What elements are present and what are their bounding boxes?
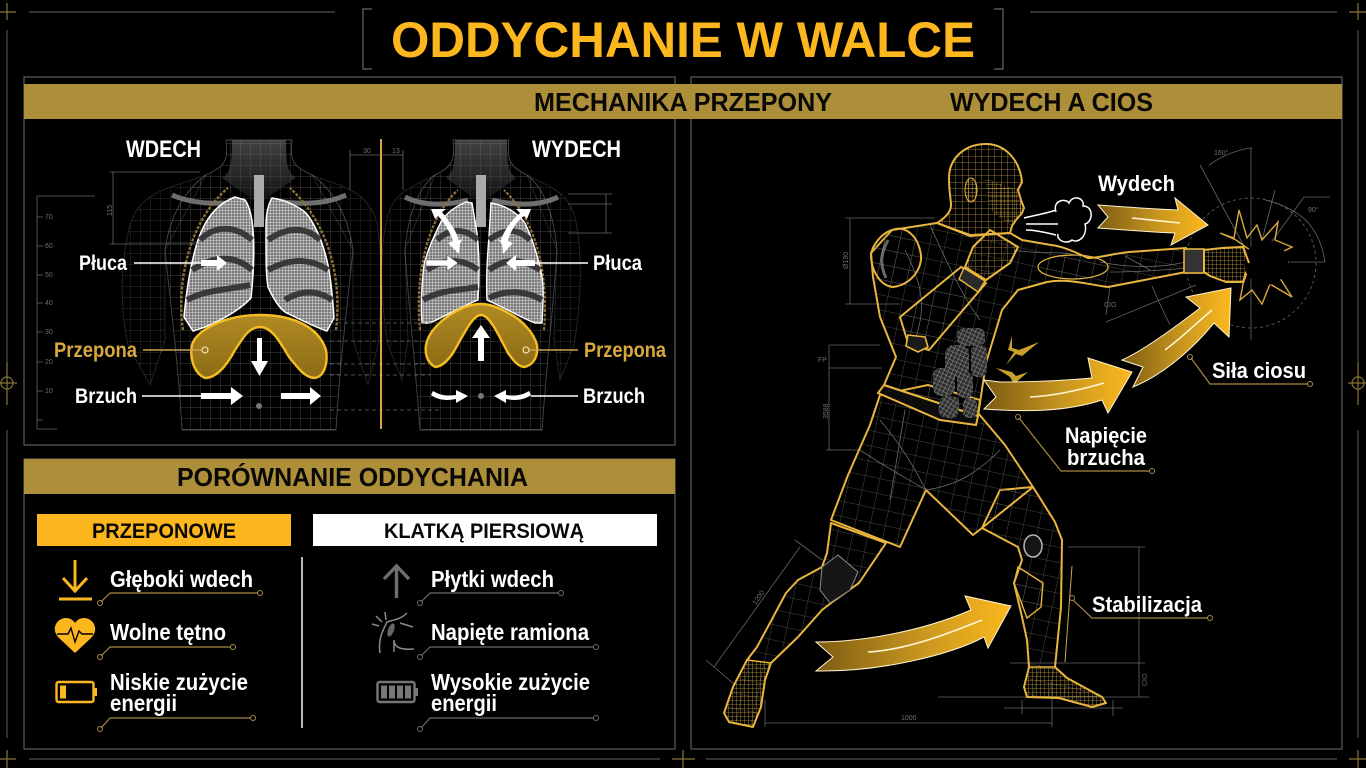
- rear knee: [820, 555, 858, 603]
- column header: przeponowe: [37, 514, 291, 546]
- lung ruler: 60: [45, 243, 53, 250]
- lightning: abdomen tension: [996, 336, 1039, 384]
- lead wrist wrap: [1184, 249, 1204, 273]
- right lung: [266, 198, 334, 331]
- neck glow: [446, 140, 516, 200]
- arrow: stabilizacja: [816, 596, 1011, 671]
- heading bar: porownanie: PORÓWNANIE ODDYCHANIA: [177, 462, 528, 492]
- label: przepona left: [54, 339, 208, 362]
- arrow: wydech: [1098, 198, 1208, 245]
- navel left: [256, 403, 262, 409]
- panel: mechanika przepony frame: [24, 77, 675, 445]
- fighter dimensions: 90°: [1308, 206, 1319, 214]
- label: wydech: WYDECH: [532, 136, 621, 163]
- item: niskie zuzycie: [56, 669, 256, 732]
- heading bar: [24, 84, 1342, 119]
- diaphragm: [191, 315, 327, 378]
- item: napiete ramiona: [372, 612, 598, 660]
- rear leg: [724, 523, 886, 727]
- icon: battery full: [378, 682, 414, 702]
- item: gleboki wdech: [59, 560, 262, 606]
- torso dimensions: 30: [363, 148, 371, 155]
- icon: tense shoulder: [372, 612, 414, 653]
- torso dimensions: 115: [107, 205, 114, 216]
- item: napiete ramiona: Napięte ramiona: [431, 619, 589, 645]
- front calf: [1014, 567, 1043, 618]
- left lung: [184, 197, 254, 331]
- lung ruler: 30: [45, 329, 53, 336]
- shorts: [831, 385, 1033, 547]
- panel: wydech a cios frame: [691, 77, 1342, 749]
- label: wydech callout: Wydech: [1098, 171, 1175, 196]
- fighter dimensions: 1000: [901, 715, 917, 722]
- head: [937, 144, 1024, 236]
- guard forearm: [900, 267, 986, 350]
- torso mesh: [165, 140, 353, 430]
- label: przepona right: Przepona: [584, 339, 666, 362]
- collar bones: [405, 197, 558, 204]
- heading: mechanika przepony: MECHANIKA PRZEPONY: [534, 87, 832, 117]
- left lung: [421, 202, 479, 323]
- collar bones: [172, 195, 346, 203]
- label: brzuch right: [431, 385, 645, 408]
- guard wrist: [959, 268, 985, 292]
- ribs: [423, 231, 542, 300]
- label: stabilizacja: [1065, 566, 1212, 662]
- elbow: [906, 335, 928, 352]
- item: gleboki wdech: Głęboki wdech: [110, 566, 253, 592]
- diagram: wydech torso: [382, 140, 580, 430]
- icon: arrow up: [384, 566, 409, 598]
- label: napiecie brzucha: [1016, 414, 1154, 474]
- label: brzuch left: [75, 385, 321, 408]
- ribs: [187, 229, 332, 300]
- column header: klatka piersiowa: KLATKĄ PIERSIOWĄ: [384, 520, 584, 543]
- label: sila ciosu: Siła ciosu: [1212, 358, 1306, 383]
- lung ruler: 50: [45, 272, 53, 279]
- belt: [878, 385, 978, 425]
- trachea: [254, 175, 264, 227]
- fighter dimensions: Ø190: [843, 252, 850, 269]
- arrow: ribs left curved: [431, 209, 463, 254]
- biceps: [1038, 255, 1108, 279]
- arms mesh: [122, 175, 381, 385]
- label: pluca left: Płuca: [79, 252, 127, 275]
- item: niskie zuzycie: Niskie zużycie: [110, 669, 248, 695]
- right lung: [487, 203, 543, 323]
- label: przepona right: [523, 339, 666, 362]
- heading: wydech a cios: WYDECH A CIOS: [950, 87, 1153, 117]
- label: napiecie brzucha: Napięcie: [1065, 423, 1147, 448]
- fighter dimensions: CIO: [1104, 302, 1117, 309]
- label: brzuch left: Brzuch: [75, 385, 137, 408]
- label: stabilizacja: Stabilizacja: [1092, 592, 1203, 617]
- label: pluca right: [426, 252, 642, 275]
- fighter dimensions: [706, 148, 1330, 727]
- icon: heart: [55, 618, 95, 653]
- torso dimensions: 13: [392, 148, 400, 155]
- rear foot mesh: [724, 660, 771, 727]
- diagram: wdech torso: [122, 140, 381, 430]
- icon: impact burst: [1220, 210, 1292, 304]
- item: niskie zuzycie: energii: [110, 690, 177, 716]
- fighter dimensions: 160°: [1214, 149, 1229, 157]
- torso and lead arm: [871, 223, 1186, 416]
- rib cage gold: [181, 188, 337, 330]
- item: plytki wdech: [384, 566, 564, 606]
- item: wolne tetno: Wolne tętno: [110, 619, 226, 645]
- label: pluca right: Płuca: [593, 252, 642, 275]
- lung ruler: 70: [45, 214, 53, 221]
- icon: breath cloud: [1024, 198, 1091, 242]
- item: wysokie zuzycie: Wysokie zużycie: [431, 669, 590, 695]
- lung ruler: [37, 196, 95, 429]
- diaphragm: [426, 304, 537, 367]
- fighter dimensions: FP: [818, 357, 827, 364]
- arrow: napiecie brzucha: [984, 358, 1132, 413]
- front foot mesh: [1024, 667, 1106, 707]
- arms mesh: [382, 175, 580, 380]
- item: wysokie zuzycie: [378, 669, 598, 732]
- heading bar: porownanie: [24, 459, 675, 494]
- lead glove: [1204, 247, 1249, 282]
- shorts fill lines: [860, 410, 1000, 500]
- item: wolne tetno: [55, 618, 236, 660]
- fighter dimensions: 1200: [752, 590, 766, 606]
- guard glove: [965, 230, 1018, 280]
- rib cage gold: [419, 190, 545, 330]
- lung ruler: 20: [45, 359, 53, 366]
- arrow: diaphragm up: [472, 325, 490, 361]
- fighter dimensions: 3588: [823, 403, 830, 419]
- face mesh: [985, 178, 1024, 226]
- label: przepona left: Przepona: [54, 339, 137, 362]
- icon: arrow down: [59, 560, 92, 599]
- panel: porownanie frame: [24, 459, 675, 749]
- trachea: [476, 175, 486, 227]
- label: wdech: WDECH: [126, 136, 201, 163]
- arrow: sila ciosu: [1122, 288, 1231, 387]
- arrow: ribs right curved: [497, 209, 531, 254]
- shoulder: [871, 229, 921, 287]
- torso dimensions: [107, 148, 612, 410]
- front kneecap: [1024, 535, 1042, 557]
- lung ruler: 10: [45, 388, 53, 395]
- item: wysokie zuzycie: energii: [431, 690, 497, 716]
- label: sila ciosu: [1188, 354, 1312, 386]
- column header: klatka piersiowa: [313, 514, 657, 546]
- divider: [380, 139, 382, 429]
- ear: [965, 178, 977, 202]
- item: plytki wdech: Płytki wdech: [431, 566, 554, 592]
- column header: przeponowe: PRZEPONOWE: [92, 520, 236, 543]
- icon: battery low: [56, 682, 94, 702]
- label: pluca left: [79, 252, 227, 275]
- label: brzuch right: Brzuch: [583, 385, 645, 408]
- fighter figure: [724, 144, 1249, 727]
- title: ODDYCHANIE W WALCE: [391, 12, 975, 68]
- torso mesh: [405, 140, 557, 430]
- front leg: [982, 487, 1106, 707]
- column divider: [301, 557, 303, 728]
- arrow: diaphragm down: [251, 338, 268, 376]
- neck glow: [222, 140, 296, 200]
- abs: [933, 328, 987, 419]
- fighter dimensions: CIO: [1142, 673, 1149, 686]
- lung ruler: 40: [45, 300, 53, 307]
- label: napiecie brzucha: brzucha: [1067, 445, 1146, 470]
- muscle lines: [905, 225, 1186, 340]
- navel right: [478, 393, 484, 399]
